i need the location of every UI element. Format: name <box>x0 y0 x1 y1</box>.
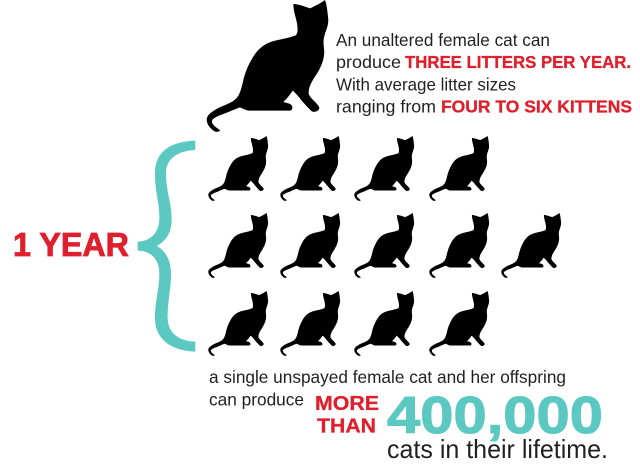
text block: litter facts: An unaltered female cat can <box>336 30 550 50</box>
text: more than: THAN <box>317 414 376 438</box>
big number: 400,000: 400,000 <box>387 387 603 445</box>
text: more than <box>315 392 379 438</box>
text block: litter facts: With average litter sizes <box>336 74 516 94</box>
text block: litter facts: THREE LITTERS PER YEAR. <box>405 52 631 72</box>
text: more than: MORE <box>315 392 379 415</box>
text block: litter facts: FOUR TO SIX KITTENS <box>441 96 632 116</box>
text block: offspring intro <box>209 367 566 410</box>
cat grid: row 3 <box>208 291 489 356</box>
text block: offspring intro: a single unspayed female cat and her offspring <box>209 367 566 387</box>
text block: offspring intro: can produce <box>209 390 304 410</box>
text block: litter facts: ranging from <box>336 96 436 116</box>
icon: large black cat <box>207 0 328 132</box>
cat grid: row 2 <box>208 213 561 278</box>
icon: teal curly brace <box>138 141 195 352</box>
label: 1 year: 1 YEAR <box>13 226 129 263</box>
text: cats in their lifetime: cats in their lifetime. <box>387 434 608 464</box>
cat grid: row 1 <box>208 136 489 201</box>
text block: litter facts: produce <box>336 52 401 72</box>
text block: litter facts <box>336 30 632 116</box>
